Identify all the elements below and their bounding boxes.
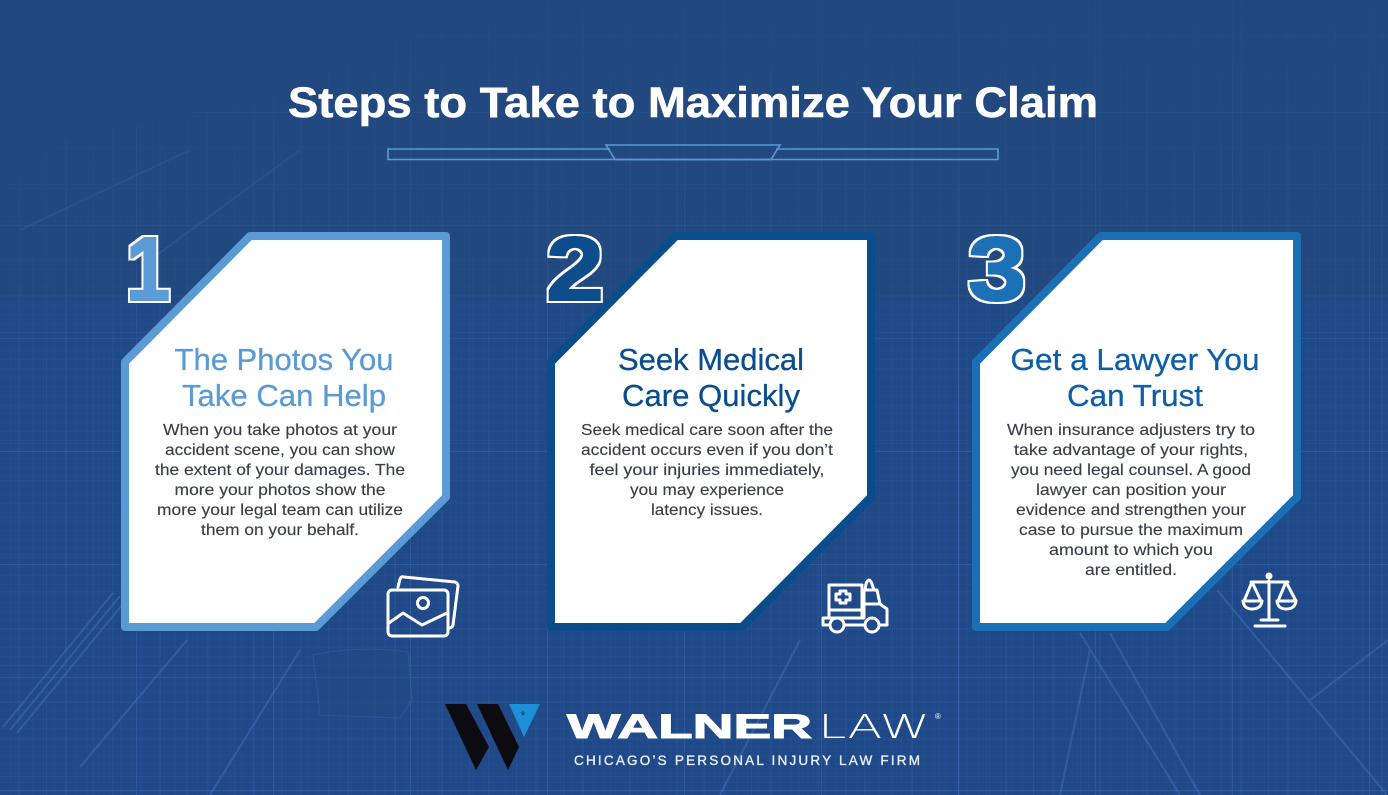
registered mark: ® <box>935 712 941 721</box>
wordmark: WALNER <box>567 708 812 746</box>
body text 3: When insurance adjusters try to <box>1007 422 1255 439</box>
heading: seek medical care quickly: Seek Medical <box>618 342 804 377</box>
body text 3: evidence and strengthen your <box>1016 502 1247 519</box>
number 2: 2 <box>546 220 604 320</box>
body text 3: case to pursue the maximum <box>1019 522 1243 539</box>
body text 3: lawyer can position your <box>1036 482 1227 499</box>
number 3: 3 <box>968 220 1026 320</box>
body text 1: When you take photos at your <box>163 422 398 439</box>
body text 1: more your legal team can utilize <box>157 502 403 519</box>
title: Steps to Take to Maximize Your Claim <box>288 79 1098 127</box>
card shape 3 <box>976 236 1297 627</box>
logo mark: * <box>520 708 526 723</box>
body text 1: them on your behalf. <box>201 522 359 539</box>
body text 3: are entitled. <box>1085 562 1177 579</box>
logo: Walner Law <box>445 704 941 770</box>
heading: the photos you take can help: The Photos You <box>174 342 394 377</box>
heading: the photos you take can help: Take Can Help <box>182 378 386 413</box>
wordmark light: LAW <box>818 707 930 746</box>
body text 3: amount to which you <box>1049 542 1213 559</box>
heading: get a lawyer you can trust: Can Trust <box>1067 378 1203 413</box>
body text 1: the extent of your damages. The <box>155 462 405 479</box>
body text 2: feel your injuries immediately, <box>590 462 824 479</box>
panel: step 2 medical care <box>546 220 887 632</box>
icon: photos <box>388 577 458 636</box>
tagline: CHICAGO’S PERSONAL INJURY LAW FIRM <box>574 753 920 768</box>
card shape 2 <box>551 236 871 627</box>
body text 2: you may experience <box>630 482 784 499</box>
heading: get a lawyer you can trust: Get a Lawyer You <box>1010 342 1260 377</box>
panel: step 1 photos <box>125 220 458 636</box>
body text 2: Seek medical care soon after the <box>581 422 833 439</box>
title divider <box>388 145 998 160</box>
icon: scales of justice <box>1243 574 1296 626</box>
heading: seek medical care quickly <box>618 342 804 413</box>
body text 1: accident scene, you can show <box>165 442 395 459</box>
body text 2: latency issues. <box>651 502 763 519</box>
body text 3: you need legal counsel. A good <box>1011 462 1251 479</box>
body text 3 <box>1007 422 1255 579</box>
heading: the photos you take can help <box>174 342 394 413</box>
body text 2: accident occurs even if you don’t <box>581 442 834 459</box>
body text 1: more your photos show the <box>174 482 386 499</box>
panel: step 3 lawyer <box>968 220 1297 627</box>
number 1: 1 <box>126 220 170 320</box>
body text 1 <box>155 422 405 539</box>
body text 2 <box>581 422 834 519</box>
body text 3: take advantage of your rights, <box>1014 442 1248 459</box>
card shape 1 <box>125 236 446 627</box>
logo mark <box>445 704 540 770</box>
heading: seek medical care quickly: Care Quickly <box>622 378 800 413</box>
icon: ambulance <box>823 580 887 632</box>
heading: get a lawyer you can trust <box>1010 342 1260 413</box>
